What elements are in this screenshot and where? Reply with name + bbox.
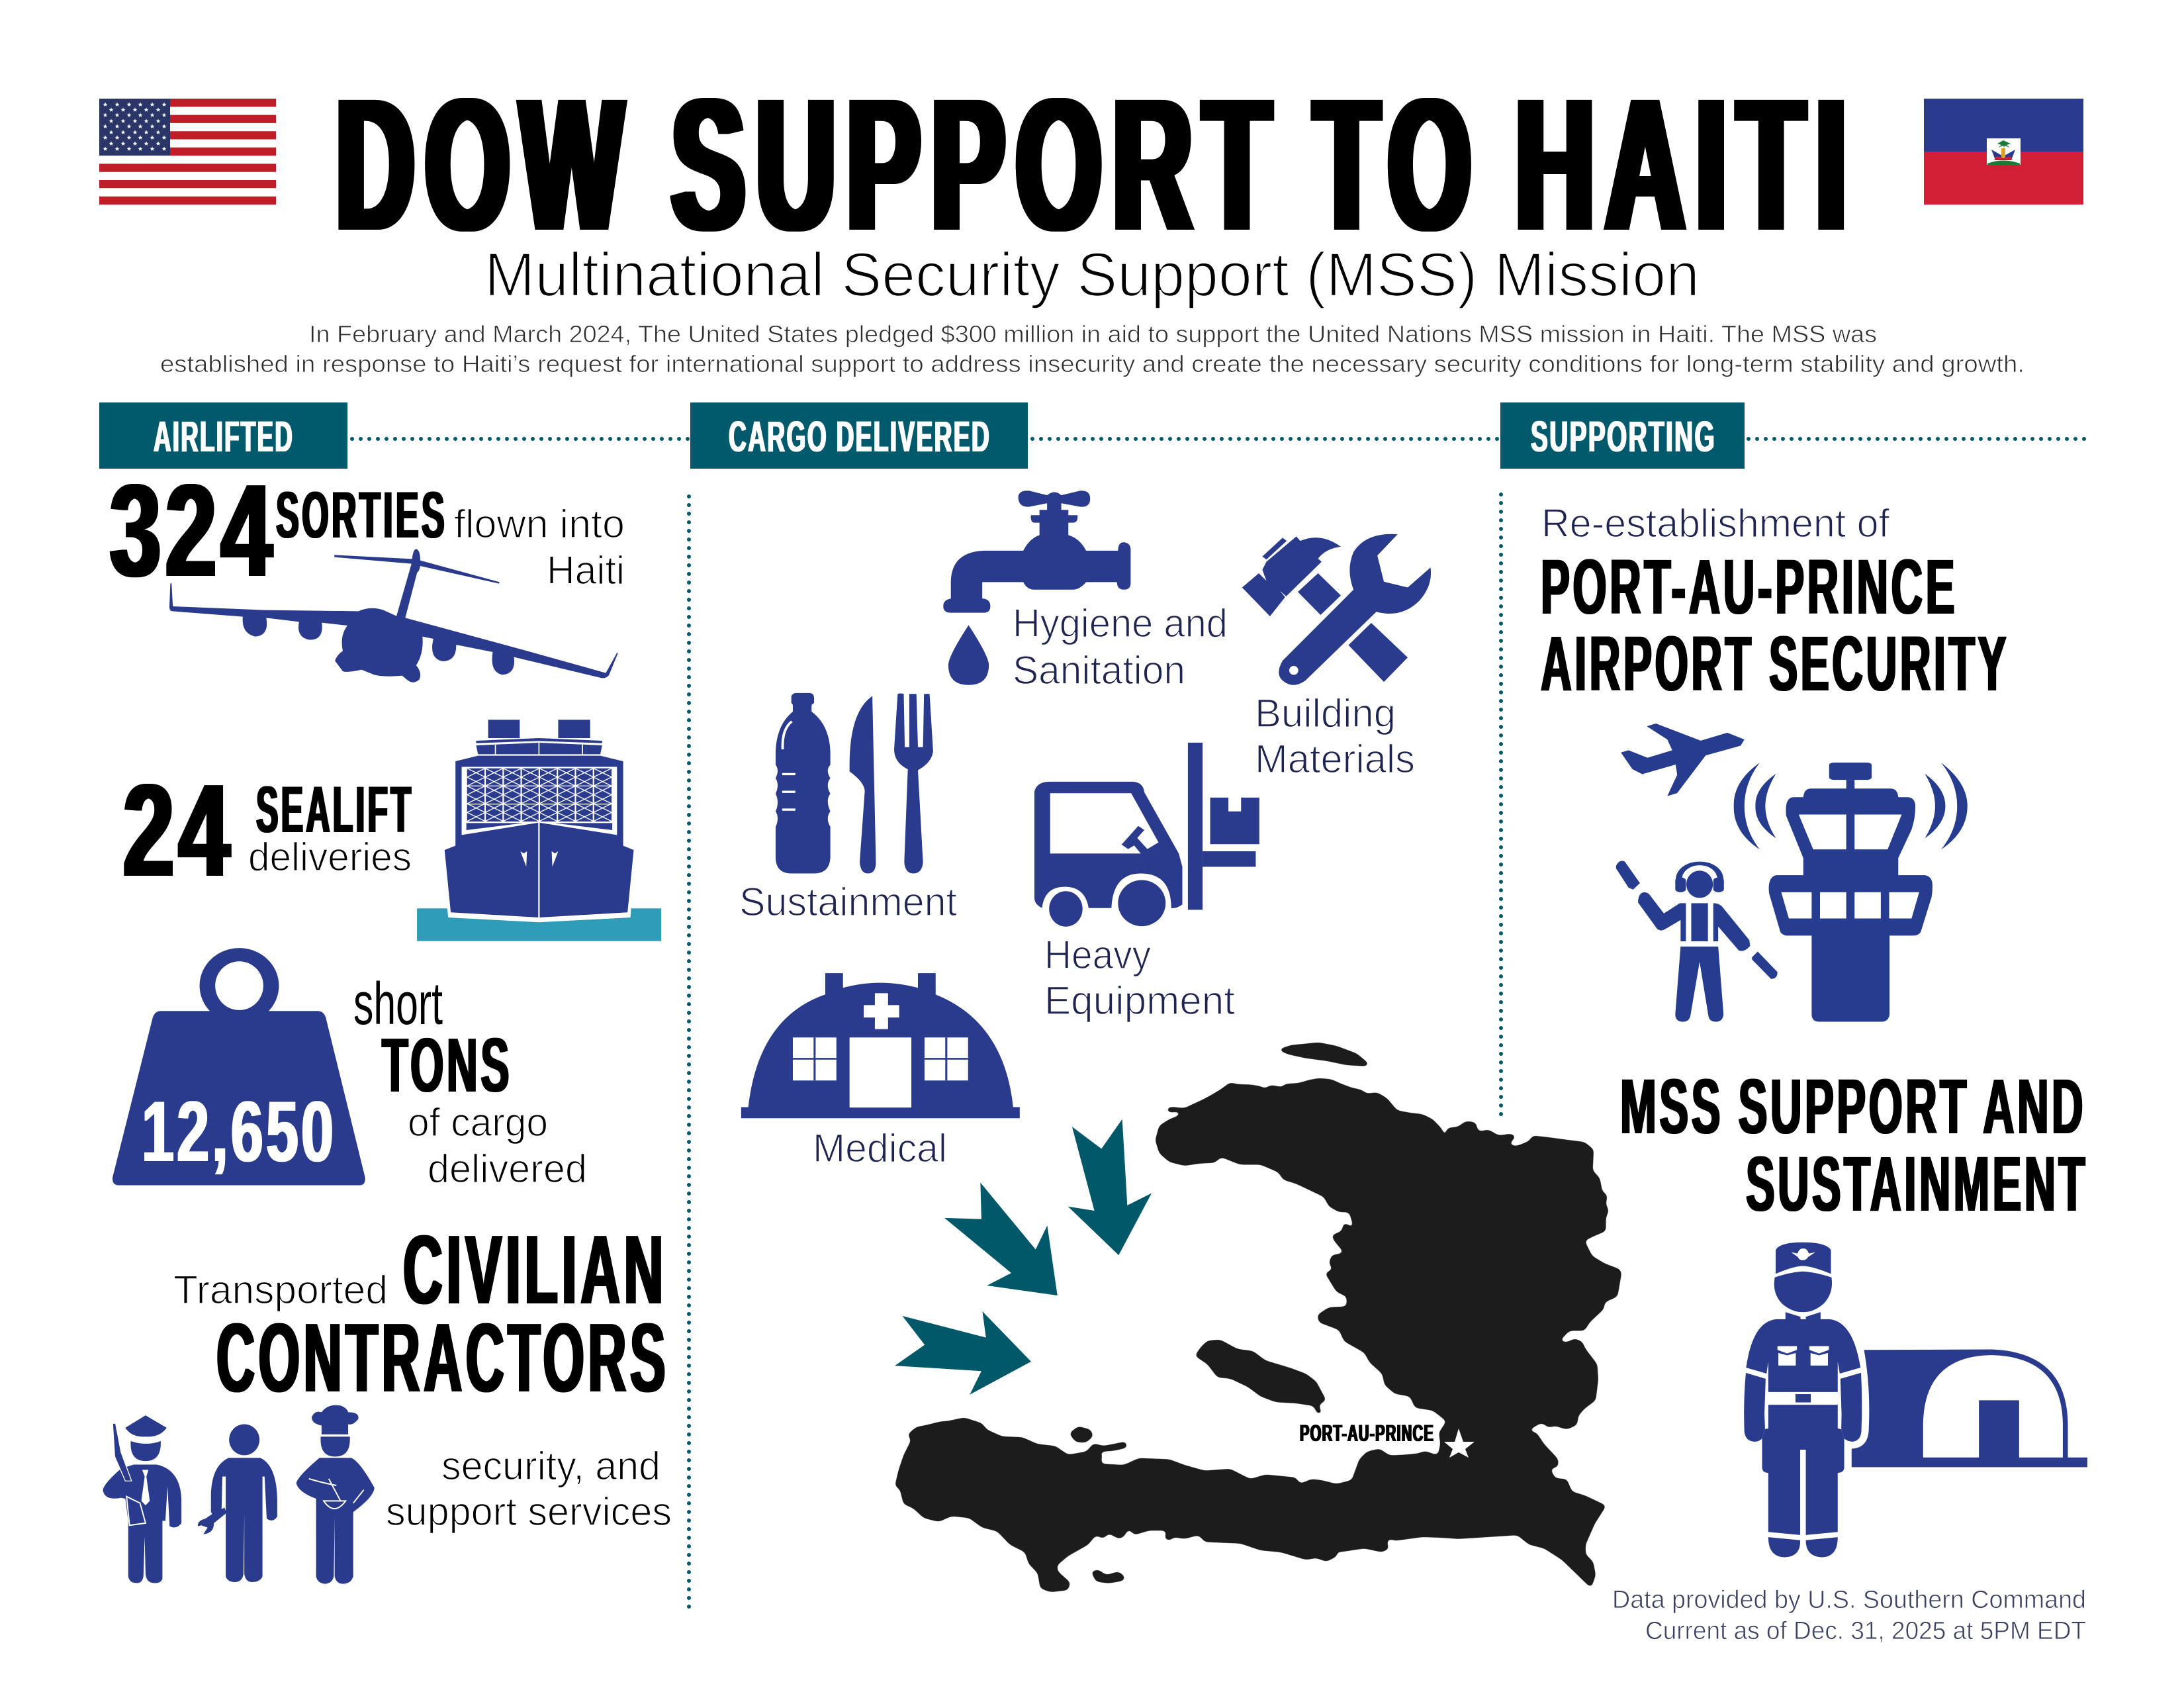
- label: heavy equipment: [1044, 933, 1235, 1023]
- icon: hangar: [1852, 1350, 2087, 1467]
- icon: airplane: [1621, 724, 1745, 796]
- icon: radio waves: [1734, 763, 1968, 849]
- section header: cargo delivered: CARGO DELIVERED: [729, 412, 991, 461]
- subtitle: Multinational Security Support (MSS) Mission: [484, 240, 1700, 309]
- stat: 324 sorties: Haiti: [547, 548, 625, 592]
- stat: 24 sealift deliveries: deliveries: [248, 835, 412, 879]
- title: TO: [1314, 60, 1482, 270]
- icon: faucet: [943, 491, 1130, 613]
- source note: [1612, 1586, 2086, 1645]
- icon: US flag: [99, 99, 276, 205]
- title: DOW: [336, 60, 634, 270]
- stat: 12,650 short tons: TONS: [382, 1022, 512, 1108]
- label: building materials: Materials: [1255, 737, 1415, 781]
- stat: civilian contractors: CIVILIAN: [403, 1215, 667, 1325]
- stat: 12,650 short tons: short: [353, 971, 443, 1037]
- icon: chef: [296, 1405, 375, 1584]
- source note: Data provided by U.S. Southern Command: [1612, 1586, 2086, 1614]
- stat: 24 sealift deliveries: [123, 757, 414, 904]
- label: medical: Medical: [813, 1126, 947, 1170]
- panel: supporting: [1541, 501, 2088, 1645]
- panel: cargo delivered: [741, 491, 1431, 1118]
- label: hygiene and sanitation: [1013, 601, 1228, 692]
- stat: civilian contractors: security, and: [441, 1444, 660, 1488]
- arrow: bottom: [895, 1311, 1031, 1395]
- label: sustainment: Sustainment: [739, 880, 957, 924]
- icon: mechanic: [198, 1425, 277, 1582]
- title: SUPPORT: [672, 60, 1282, 270]
- heading: MSS support and sustainment: [1620, 1063, 2088, 1228]
- icon: marshal: [1616, 861, 1778, 1022]
- icon: soldier: [1744, 1243, 1862, 1557]
- label: building materials: [1255, 691, 1415, 781]
- stat: 324 sorties: flown into: [454, 502, 625, 546]
- heading: airport security: Re-establishment of: [1541, 501, 1889, 545]
- icon: control tower: [1769, 763, 1933, 1022]
- map: Haiti: [895, 1043, 1621, 1592]
- stat: civilian contractors: CONTRACTORS: [216, 1303, 669, 1413]
- icon: star marker: [1444, 1429, 1475, 1458]
- icon: security guard: [103, 1415, 181, 1583]
- arrow: top: [1068, 1119, 1152, 1255]
- icon: Haiti flag: [1924, 99, 2083, 205]
- source note: Current as of Dec. 31, 2025 at 5PM EDT: [1645, 1617, 2086, 1645]
- stat: 24 sealift deliveries: 24: [123, 757, 234, 904]
- stat: civilian contractors: Transported: [173, 1268, 388, 1312]
- icon: knife: [850, 696, 876, 873]
- stat: 12,650 short tons: [113, 948, 587, 1191]
- stat: 24 sealift deliveries: SEALIFT: [256, 773, 414, 846]
- icon: hammer and wrench: [1242, 534, 1431, 685]
- icon: cargo plane: [169, 549, 618, 682]
- section header: supporting: [1500, 402, 1745, 469]
- icon: contractors: [103, 1405, 375, 1584]
- title: [336, 60, 1858, 270]
- icon: container ship: [417, 720, 661, 941]
- stat: civilian contractors: support services: [386, 1489, 672, 1534]
- stat: 12,650 short tons: 12,650: [142, 1083, 336, 1180]
- stat: civilian contractors: [173, 1215, 672, 1534]
- arrow: middle: [944, 1182, 1058, 1295]
- label: heavy equipment: Equipment: [1044, 978, 1235, 1023]
- intro text: In February and March 2024, The United States pledged $300 million in aid to support the United Nations MSS mission in Haiti. The MSS was: [309, 320, 1877, 348]
- icon: weight: [113, 948, 365, 1185]
- icon: fork: [894, 694, 933, 873]
- icon: water bottle: [776, 693, 831, 873]
- label: hygiene and sanitation: Sanitation: [1013, 648, 1185, 692]
- stat: 324 sorties: [110, 457, 625, 604]
- icon: soldier and hangar: [1744, 1243, 2087, 1557]
- stat: 12,650 short tons: delivered: [428, 1147, 587, 1191]
- section header: cargo delivered: [690, 402, 1028, 469]
- panel: airlifted: [103, 457, 672, 1584]
- label: hygiene and sanitation: Hygiene and: [1013, 601, 1228, 645]
- intro text: established in response to Haiti’s request for international support to address insecurity and create the necessary security conditions for long-term stability and growth.: [160, 350, 2025, 377]
- label: building materials: Building: [1255, 691, 1396, 735]
- icon: airport tower and marshal: [1616, 724, 1968, 1022]
- section header: airlifted: AIRLIFTED: [154, 412, 294, 461]
- icon: water drop: [948, 625, 989, 685]
- heading: airport security: [1541, 501, 2009, 708]
- stat: 324 sorties: 324: [110, 457, 277, 604]
- icon: forklift: [1034, 743, 1259, 927]
- stat: 324 sorties: SORTIES: [276, 478, 447, 551]
- label: heavy equipment: Heavy: [1044, 933, 1151, 977]
- arrows pointing to Haiti: [895, 1119, 1152, 1395]
- stat: 12,650 short tons: of cargo: [408, 1100, 548, 1145]
- section header: airlifted: [99, 402, 347, 469]
- map label: Port-au-Prince: PORT-AU-PRINCE: [1300, 1421, 1434, 1446]
- icon: medical hut: [741, 973, 1020, 1118]
- section header: supporting: SUPPORTING: [1531, 412, 1716, 461]
- title: HAITI: [1516, 60, 1858, 270]
- labels: cargo categories: [739, 601, 1415, 1170]
- intro text: [160, 320, 2025, 377]
